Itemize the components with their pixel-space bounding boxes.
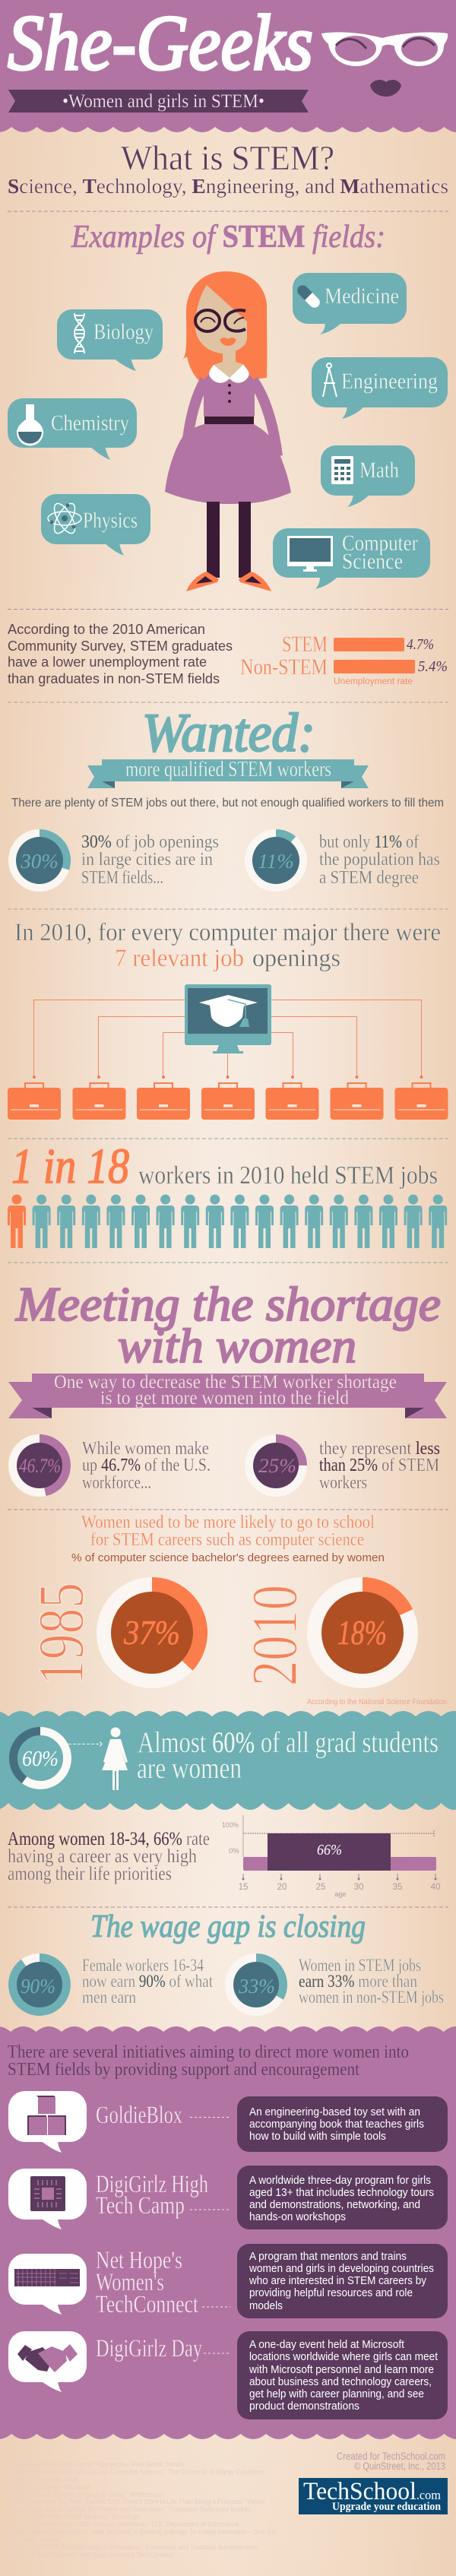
text: almost 60 percent <box>137 1726 439 1785</box>
description box: product demonstrations <box>249 2400 359 2413</box>
chart: 66 percent by age: 35 <box>393 1883 402 1892</box>
text: sources: "Women and STEM Careers: How Microsoft is Building a Bridge To Future Innovation - One Girl <box>8 2528 277 2536</box>
title: She-Geeks <box>8 0 313 87</box>
text: 25 percent: than 25% of STEM <box>319 1456 439 1475</box>
text: 25 percent: workers <box>319 1473 367 1493</box>
initiative: Net Hope's Women's TechConnect: Women's <box>96 2269 164 2296</box>
donut: 30 percent: 30% <box>20 850 59 873</box>
description box <box>237 2166 448 2229</box>
text: 30 percent: in large cities are in <box>81 850 213 870</box>
initiative: GoldieBlox <box>8 2091 448 2153</box>
bubble: physics <box>41 494 150 556</box>
text: sources: "Women's TechConnect," Net Hope Women's TechConnect <box>8 2551 173 2559</box>
bubble: computer science: Computer <box>342 531 418 556</box>
text: 33 percent: earn 33% more than <box>299 1972 417 1991</box>
bubble: biology: Biology <box>93 319 154 344</box>
description box <box>237 2096 448 2152</box>
chart: 2010 donut <box>238 1577 418 1688</box>
initiative: GoldieBlox: GoldieBlox <box>96 2102 182 2129</box>
stat: 1 in 18: 1 in 18 <box>11 1139 129 1194</box>
icon: DNA <box>74 313 84 353</box>
text: sources: "A Reboot in Recruiting Women Into Computer Science," The Chronicle of Higher Education <box>8 2468 264 2476</box>
bar chart: unemployment rate: 5.4% <box>418 658 448 675</box>
text: 46.7 percent <box>82 1439 211 1493</box>
stat: 1 in 18 <box>11 1139 438 1194</box>
chart: 2010 donut: 18% <box>337 1613 387 1652</box>
donut: 30 percent <box>8 829 71 892</box>
text: almost 60 percent: are women <box>137 1752 242 1785</box>
chart: 66 percent by age: 15 <box>239 1883 248 1892</box>
initiative: DigiGirlz Day: DigiGirlz Day <box>96 2335 202 2362</box>
text: unemployment intro: than graduates in non-STEM fields <box>8 671 220 686</box>
description box: A one-day event held at Microsoft <box>249 2339 404 2351</box>
donut: 46.7 percent <box>8 1434 71 1497</box>
text: 90 percent: Female workers 16-34 <box>82 1956 204 1975</box>
subtitle ribbon: •Women and girls in STEM• <box>62 91 264 112</box>
heading: wage gap: The wage gap is closing <box>90 1909 366 1944</box>
text: 25 percent <box>319 1439 440 1493</box>
bar chart: unemployment rate: STEM <box>282 632 328 657</box>
text: sources: "Report to the President: Engage to Excel," Whitehouse <box>8 2491 163 2498</box>
heading: what is STEM: What is STEM? <box>121 138 334 177</box>
text: sources: "The Need for More STEM Workers," Brookings <box>8 2513 140 2521</box>
description box: providing helpful resources and role <box>249 2287 413 2299</box>
panel: header <box>0 0 456 132</box>
icon: microchip <box>30 2176 65 2211</box>
description box: how to build with simple tools <box>249 2131 386 2143</box>
ribbon: more qualified STEM workers <box>87 758 369 788</box>
text: 33 percent: Women in STEM jobs <box>299 1956 421 1975</box>
text: unemployment intro: have a lower unemployment rate <box>8 654 207 670</box>
description box <box>237 2244 448 2318</box>
description box: women and girls in developing countries <box>249 2263 434 2275</box>
initiative: DigiGirlz High Tech Camp: DigiGirlz High <box>96 2171 208 2198</box>
bar chart: unemployment rate: Unemployment rate <box>334 677 413 686</box>
arrow <box>190 2116 230 2118</box>
text: 25 percent: they represent less <box>319 1439 440 1459</box>
description box: locations worldwide where girls can meet <box>249 2351 438 2363</box>
donut: 25 percent <box>245 1434 307 1497</box>
description box: with Microsoft personnel and learn more <box>249 2364 434 2376</box>
chart: 66 percent by age: 20 <box>277 1883 287 1892</box>
chart: 66 percent by age: 100% <box>222 1821 239 1830</box>
ribbon: decrease shortage <box>8 1372 447 1418</box>
panel: grad students band <box>0 1711 456 1810</box>
heading: wanted: Wanted: <box>142 702 315 763</box>
logo: TechSchool: TechSchool.com <box>303 2478 441 2505</box>
icons: briefcases <box>8 1083 448 1120</box>
icon: monitor <box>287 536 333 572</box>
text: computer major: 7 relevant job <box>115 945 244 972</box>
icon: lips <box>370 80 401 97</box>
heading: meeting the shortage: with women <box>118 1319 356 1373</box>
description box: hands-on workshops <box>249 2211 346 2223</box>
description box: and demonstrations, networking, and <box>249 2199 420 2211</box>
chart: 66 percent by age: 0% <box>229 1847 239 1855</box>
icon: glasses <box>321 32 448 66</box>
text: 46.7 percent: While women make <box>82 1439 209 1459</box>
chart: 66 percent by age: 25 <box>316 1883 325 1892</box>
bar chart: unemployment rate: 4.7% <box>407 636 434 653</box>
icon: keyboard <box>14 2269 80 2286</box>
text: 30 percent: STEM fields... <box>81 868 163 888</box>
text: computer major: openings <box>252 945 340 972</box>
icon: handshake <box>17 2344 78 2372</box>
text: computer science degrees intro: for STEM careers such as computer science <box>90 1530 364 1550</box>
description box: accompanying book that teaches girls <box>249 2118 424 2131</box>
bubble: computer science: Science <box>342 549 403 574</box>
text: 11 percent <box>319 832 440 888</box>
text: life priorities <box>8 1829 210 1884</box>
bar chart: unemployment rate: Non-STEM <box>240 654 328 680</box>
donut: 11 percent <box>245 829 307 892</box>
text: sources: Sources <box>8 2453 33 2460</box>
arrow <box>190 2209 230 2210</box>
text: computer science degrees intro <box>71 1513 385 1564</box>
description box: who are interested in STEM careers by <box>249 2275 427 2287</box>
text: initiatives intro <box>8 2042 409 2080</box>
donut: 11 percent: 11% <box>258 850 294 873</box>
text: sources <box>8 2453 277 2559</box>
icon: compass <box>323 363 337 397</box>
text: 11 percent: a STEM degree <box>319 868 419 888</box>
text: sources: At a Time," Forbes <box>8 2536 59 2543</box>
icon: atom <box>48 500 81 537</box>
chart: 1985 donut: 1985 <box>24 1583 97 1685</box>
bubble: medicine <box>293 273 407 334</box>
text: credits <box>337 2451 445 2472</box>
text: 90 percent: now earn 90% of what <box>82 1972 213 1991</box>
text: sources: "High Tech Camp," Microsoft <box>8 2483 90 2491</box>
donut: 33 percent <box>225 1953 287 2016</box>
icon: toy blocks <box>27 2096 66 2135</box>
chart: 66 percent by age: age <box>334 1890 347 1898</box>
heading: examples of STEM fields: Examples of STEM fields: <box>71 220 385 255</box>
donut: 33 percent: 33% <box>238 1975 275 1998</box>
text: sources: "The Gender Gap in College Enrollment and Graduation," Population Reference Bureau <box>8 2505 251 2513</box>
description box: models <box>249 2300 283 2312</box>
logo: TechSchool <box>299 2478 448 2514</box>
chart: 66 percent by age: 30 <box>354 1883 363 1892</box>
pictogram: eighteen workers <box>8 1195 447 1248</box>
text: initiatives intro: There are several initiatives aiming to direct more women into <box>8 2042 409 2062</box>
text: 11 percent: the population has <box>319 850 440 870</box>
icon: pill <box>295 283 322 310</box>
text: 30 percent <box>81 832 219 888</box>
icon: monitor with graduation cap <box>185 984 271 1054</box>
text: 46.7 percent: workforce... <box>82 1473 151 1493</box>
description box: get help with career planning, and see <box>249 2388 424 2400</box>
ribbon: decrease shortage: One way to decrease the STEM worker shortage <box>54 1372 397 1393</box>
text: 90 percent <box>82 1956 213 2007</box>
panel: initiatives <box>0 2026 456 2439</box>
bubble: physics: Physics <box>83 508 138 533</box>
text: plenty of jobs: There are plenty of STEM jobs out there, but not enough qualified workers to fill them <box>11 797 444 810</box>
description box: An engineering-based toy set with an <box>249 2106 420 2118</box>
donut: 60 percent <box>14 1732 67 1785</box>
donut: 90 percent <box>8 1953 71 2016</box>
bubble: engineering: Engineering <box>341 369 438 394</box>
donut: 25 percent: 25% <box>258 1455 296 1477</box>
icon: woman <box>102 1727 128 1790</box>
description box: about business and technology careers, <box>249 2376 432 2388</box>
heading: meeting the shortage: Meeting the shortage <box>15 1277 441 1331</box>
bubble: computer science <box>273 528 430 589</box>
donut: 46.7 percent: 46.7% <box>19 1455 61 1477</box>
bubble: chemistry <box>8 398 137 460</box>
donut: 90 percent: 90% <box>21 1975 55 1998</box>
text: unemployment intro <box>8 622 233 686</box>
chart: 1985 donut <box>24 1577 207 1688</box>
ribbon: more qualified STEM workers: more qualified STEM workers <box>125 758 331 781</box>
bubble: chemistry: Chemistry <box>51 410 129 436</box>
heading: what is STEM <box>8 138 448 198</box>
bubble: math: Math <box>359 458 399 483</box>
chart: 66 percent by age: 40 <box>431 1883 440 1892</box>
bubble: biology <box>57 309 163 371</box>
bubble: medicine: Medicine <box>325 284 399 309</box>
description box: A program that mentors and trains <box>249 2251 407 2263</box>
initiative: DigiGirlz Day <box>8 2331 448 2419</box>
text: life priorities: Among women 18-34, 66% rate <box>8 1829 210 1849</box>
text: sources: "A Gender Reversal On Career Aspirations," Pew Social Trends <box>8 2460 184 2468</box>
text: computer science degrees intro: Women used to be more likely to go to school <box>81 1513 375 1532</box>
text: 46.7 percent: up 46.7% of the U.S. <box>82 1456 211 1475</box>
text: computer major <box>14 919 441 972</box>
bar chart: unemployment rate <box>240 632 448 686</box>
diagram: graduate connected to seven jobs <box>8 984 448 1120</box>
heading: meeting the shortage <box>15 1277 441 1373</box>
description box <box>237 2331 448 2419</box>
text: sources: "Women in STEM: A Gender Gap to Innovation," Economics and Statistics Administration <box>8 2543 258 2551</box>
arrow <box>202 2306 230 2308</box>
initiative: Net Hope's Women's TechConnect <box>8 2244 448 2318</box>
text: 90 percent: men earn <box>82 1988 136 2007</box>
bubble: math <box>321 445 415 507</box>
bubble: engineering <box>312 357 448 419</box>
initiative: DigiGirlz High Tech Camp: Tech Camp <box>96 2192 185 2220</box>
text: sources: "The Engineering Toy That Teaches Girls There's More to Life Than Being a Princess," Yahoo <box>8 2498 264 2505</box>
text: initiatives intro: STEM fields by providing support and encouragement <box>8 2060 359 2080</box>
text: sources: "The State of our Union's 21st Century Workforce," U.S. Department of Commerce <box>8 2521 239 2528</box>
text: 11 percent: but only 11% of <box>319 832 419 852</box>
text: unemployment intro: According to the 2010 American <box>8 622 205 637</box>
initiative: Net Hope's Women's TechConnect: Net Hope's <box>96 2247 182 2274</box>
chart: 2010 donut: 2010 <box>238 1585 311 1686</box>
subtitle ribbon <box>8 90 309 112</box>
text: 30 percent: 30% of job openings <box>81 832 219 852</box>
text: life priorities: having a career as very high <box>8 1846 197 1867</box>
arrow <box>204 2353 230 2354</box>
text: 33 percent <box>299 1956 444 2007</box>
icon: flask <box>17 404 43 445</box>
initiative: Net Hope's Women's TechConnect: TechConnect <box>96 2291 198 2318</box>
initiative: DigiGirlz High Tech Camp <box>8 2166 448 2229</box>
text: unemployment intro: Community Survey, STEM graduates <box>8 638 233 654</box>
text: sources: "DigiGirlz Day," Microsoft <box>8 2476 78 2483</box>
text: STEM definition: Science, Technology, Engineering, and Mathematics <box>8 175 448 198</box>
logo: TechSchool: Upgrade your education <box>332 2501 442 2513</box>
icon: calculator <box>331 456 353 484</box>
text: life priorities: among their life priorities <box>8 1864 172 1884</box>
illustration: girl <box>165 271 291 591</box>
description box: A worldwide three-day program for girls <box>249 2175 431 2187</box>
text: computer science degrees intro: % of computer science bachelor's degrees earned by women <box>71 1551 385 1564</box>
chart: 66 percent by age <box>222 1815 440 1898</box>
chart: 1985 donut: 37% <box>123 1613 180 1652</box>
chart: 66 percent by age: 66% <box>317 1842 342 1858</box>
description box: aged 13+ that includes technology tours <box>249 2187 434 2199</box>
donut: 60 percent: 60% <box>22 1747 59 1771</box>
ribbon: decrease shortage: is to get more women into the field <box>100 1388 349 1408</box>
arrow <box>68 1742 103 1747</box>
